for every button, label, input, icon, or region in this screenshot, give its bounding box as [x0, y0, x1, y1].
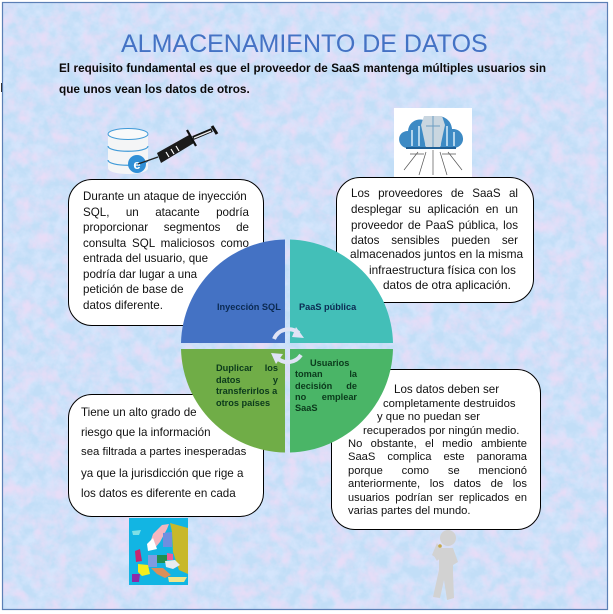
panel: SQL injection text: podría dar lugar a una [83, 268, 197, 281]
panel: bottom right text: y que no puedan ser [377, 411, 480, 423]
panel: bottom left text: Tiene un alto grado de [81, 406, 197, 419]
panel: bottom left text: sea filtrada a partes inesperadas [81, 446, 246, 458]
label: Usuarios toman la decisión [295, 358, 358, 413]
panel: SQL injection text [68, 179, 264, 326]
label: Usuarios toman la decisión: no emplear [295, 392, 357, 402]
label: Inyección SQL: Inyección SQL [217, 302, 281, 312]
panel: bottom right text: SaaS complica este panorama [348, 451, 527, 463]
label: Duplicar los datos: datos y [216, 375, 278, 385]
panel: bottom right text: varias partes del mundo. [348, 505, 471, 517]
panel: bottom left text: los datos es diferente en cada [81, 487, 236, 500]
panel: bottom left text [68, 394, 264, 517]
label: Duplicar los datos [216, 363, 278, 408]
label: Usuarios toman la decisión: toman la [295, 369, 357, 379]
label: PaaS pública: PaaS pública [299, 302, 356, 312]
pie chart: four quadrants [181, 240, 393, 452]
panel: SQL injection text: datos diferente. [83, 299, 163, 312]
intro text: que unos vean los datos de otros. [59, 82, 250, 96]
label: Duplicar los datos: Duplicar los [216, 363, 278, 373]
label: Usuarios toman la decisión: Usuarios [310, 358, 349, 368]
icon: database with syringe: e [133, 157, 141, 172]
panel: public PaaS text: proveedor de PaaS pública, los [351, 219, 518, 232]
panel: SQL injection text: SQL, un atacante podría [83, 206, 249, 219]
panel: bottom right text: completamente destruidos [383, 398, 516, 410]
panel: public PaaS text: datos de otra aplicación. [383, 278, 511, 292]
panel: bottom left text: riesgo que la información [81, 426, 211, 439]
panel: SQL injection text: entrada del usuario, que [83, 252, 208, 265]
panel: SQL injection text: petición de base de [83, 283, 184, 296]
label: Usuarios toman la decisión: SaaS [295, 403, 317, 413]
panel: bottom right text: porque como se mencionó [348, 465, 527, 477]
panel: bottom right text: recuperados por ningún medio. [363, 425, 519, 437]
panel: bottom right text: Los datos deben ser [394, 383, 499, 396]
panel: SQL injection text: proporcionar segmentos de [83, 221, 249, 234]
panel: SQL injection text: consulta SQL maliciosos como [83, 237, 249, 250]
panel: public PaaS text: Los proveedores de SaaS al [351, 187, 518, 200]
panel: public PaaS text: almacenados juntos en la misma [350, 247, 523, 261]
icon: database with syringe [107, 125, 218, 174]
title: ALMACENAMIENTO DE DATOS [121, 30, 488, 58]
intro text [59, 62, 546, 96]
panel: bottom right text: anteriormente, los datos de los [348, 478, 527, 490]
panel: SQL injection text: Durante un ataque de inyección [83, 190, 247, 203]
panel: public PaaS text: desplegar su aplicación en un [351, 203, 518, 216]
label: Usuarios toman la decisión: decisión de [295, 381, 357, 391]
icon: map of Europe [129, 518, 188, 585]
label: Duplicar los datos: transferirlos a [216, 386, 277, 396]
panel: public PaaS text: datos sensibles pueden ser [351, 234, 518, 247]
icon: cloud infrastructure [394, 108, 472, 177]
panel: bottom right text [331, 369, 541, 530]
panel: public PaaS text [336, 177, 534, 303]
label: Duplicar los datos: otros países [216, 398, 270, 408]
intro text: El requisito fundamental es que el proveedor de SaaS mantenga múltiples usuarios sin [59, 62, 546, 75]
panel: bottom right text: No obstante, el medio ambiente [348, 438, 527, 450]
panel: public PaaS text: infraestructura física con los [369, 263, 516, 277]
panel: bottom right text: usuarios podrían ser replicados en [348, 492, 527, 504]
panel: bottom left text: ya que la jurisdicción que rige a [81, 467, 243, 480]
icon: thinking person [432, 530, 458, 600]
